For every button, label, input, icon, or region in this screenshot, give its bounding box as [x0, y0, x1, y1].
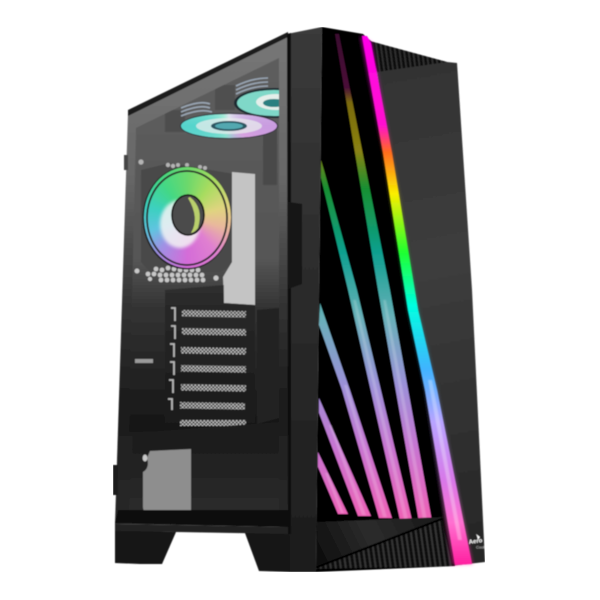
internal components: [134, 76, 280, 511]
honeycomb lower: [134, 266, 219, 282]
top fan right: [234, 88, 280, 118]
right foot: [245, 533, 292, 572]
tray screw: [135, 359, 153, 363]
drive hole: [143, 454, 147, 462]
top edge of panel: [128, 32, 288, 116]
PSU shroud: [227, 424, 247, 427]
dark motherboard tray: [165, 284, 255, 337]
strip highlights: [325, 300, 427, 520]
white plate: [223, 172, 255, 305]
strip B: [321, 160, 412, 520]
drive plate: [143, 449, 191, 511]
panel side tab: [113, 465, 118, 495]
side glass panel: [113, 32, 291, 527]
logo mark: [476, 534, 480, 540]
main RGB strip: [362, 36, 472, 565]
glass bottom bar: [115, 510, 290, 527]
panel frame edge: [287, 33, 291, 534]
honeycomb upper: [138, 159, 207, 170]
main RGB glow: [360, 36, 473, 565]
light strips: [318, 34, 432, 522]
strip highlight: [428, 380, 462, 540]
black front face: [316, 27, 455, 572]
top fan left: [180, 113, 278, 139]
top mount brackets: [165, 85, 277, 185]
cable panel: [257, 308, 279, 424]
fan fins: top fans: [181, 78, 268, 116]
hub reflections: [188, 197, 200, 233]
left foot: [115, 530, 176, 564]
logo subtext: Cool: [476, 544, 484, 550]
base rail: [115, 524, 290, 534]
upper panel side tab: [124, 155, 128, 170]
lower wedge: [317, 517, 444, 566]
rear expansion slots: [180, 310, 246, 426]
fan inner glow: [160, 200, 200, 248]
lower ribs: [315, 520, 452, 569]
interior of case: [129, 58, 279, 432]
fan hub: [172, 195, 204, 235]
fan ring: [147, 171, 227, 265]
front pillar: [287, 27, 322, 572]
case body: [113, 27, 485, 572]
slot hooks: [168, 308, 175, 410]
strip A: [335, 34, 432, 522]
strip C: [319, 303, 392, 518]
strip E: [318, 452, 348, 514]
illustration: PC case: [113, 27, 485, 572]
strip D: [319, 398, 371, 516]
side panel: [372, 42, 485, 566]
rear RGB fan: [142, 166, 232, 270]
fan bracket: [141, 163, 232, 266]
logo text: Aero: [468, 538, 483, 546]
logo: [468, 534, 484, 550]
side handle: [288, 202, 302, 289]
top vents: [370, 41, 447, 72]
